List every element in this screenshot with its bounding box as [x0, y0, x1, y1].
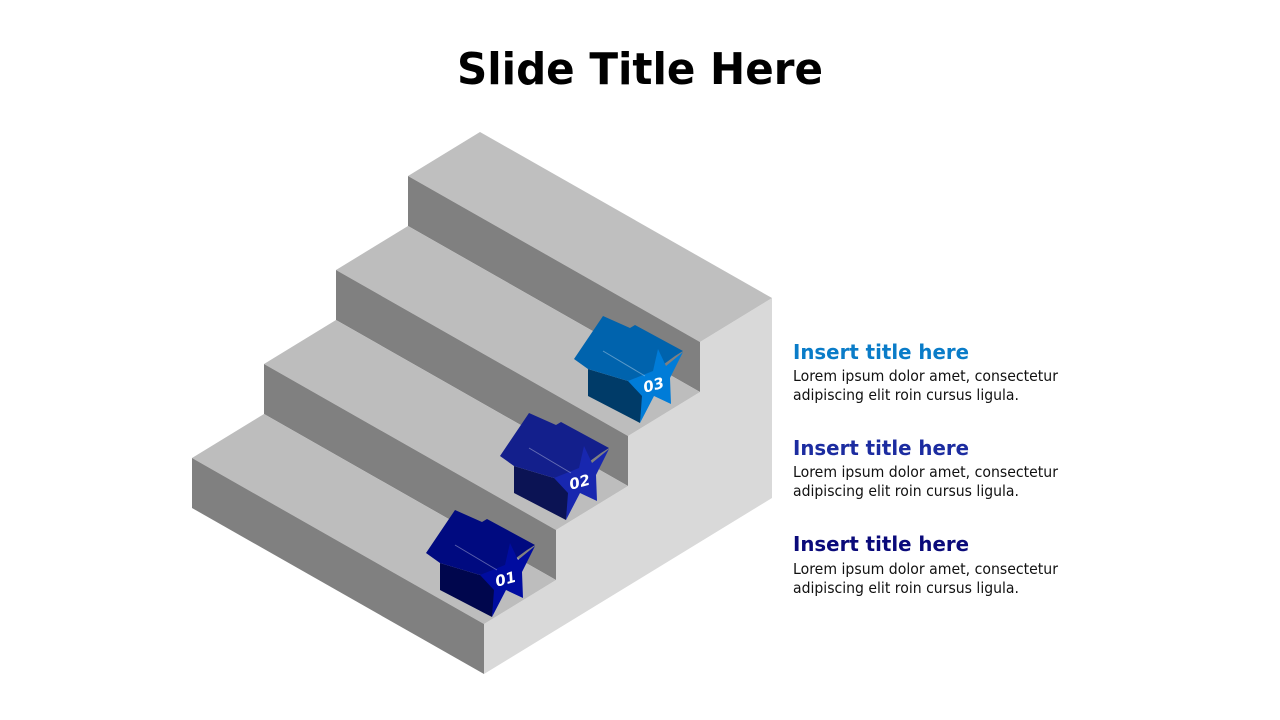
- right side wall: [484, 298, 772, 674]
- step 2: [264, 320, 628, 530]
- text block 1: [793, 532, 1059, 597]
- text block 3: Insert title here: [793, 340, 969, 364]
- text block 2: Lorem ipsum dolor amet, consectetur: [793, 463, 1059, 481]
- text block 1: Lorem ipsum dolor amet, consectetur: [793, 560, 1059, 578]
- icon: star 03: [574, 316, 683, 423]
- icon: star 01: 01: [493, 568, 518, 591]
- step 4 top: [408, 132, 772, 342]
- icon: star 02: [500, 413, 609, 520]
- text block 2: Insert title here: [793, 436, 969, 460]
- text block 2: adipiscing elit roin cursus ligula.: [793, 482, 1019, 500]
- text block 3: adipiscing elit roin cursus ligula.: [793, 386, 1019, 404]
- text block 1: Insert title here: [793, 532, 969, 556]
- text block 2: [793, 436, 1059, 500]
- staircase: [192, 132, 772, 674]
- icon: star 02: 02: [567, 471, 592, 494]
- step 1: [192, 414, 556, 624]
- icon: star 03: 03: [641, 374, 666, 397]
- text block 3: Lorem ipsum dolor amet, consectetur: [793, 367, 1059, 385]
- step 3: [336, 226, 700, 436]
- icon: star 01: [426, 510, 535, 617]
- text block 3: [793, 340, 1059, 404]
- text block 1: adipiscing elit roin cursus ligula.: [793, 579, 1019, 597]
- title: Slide Title Here: [457, 44, 823, 95]
